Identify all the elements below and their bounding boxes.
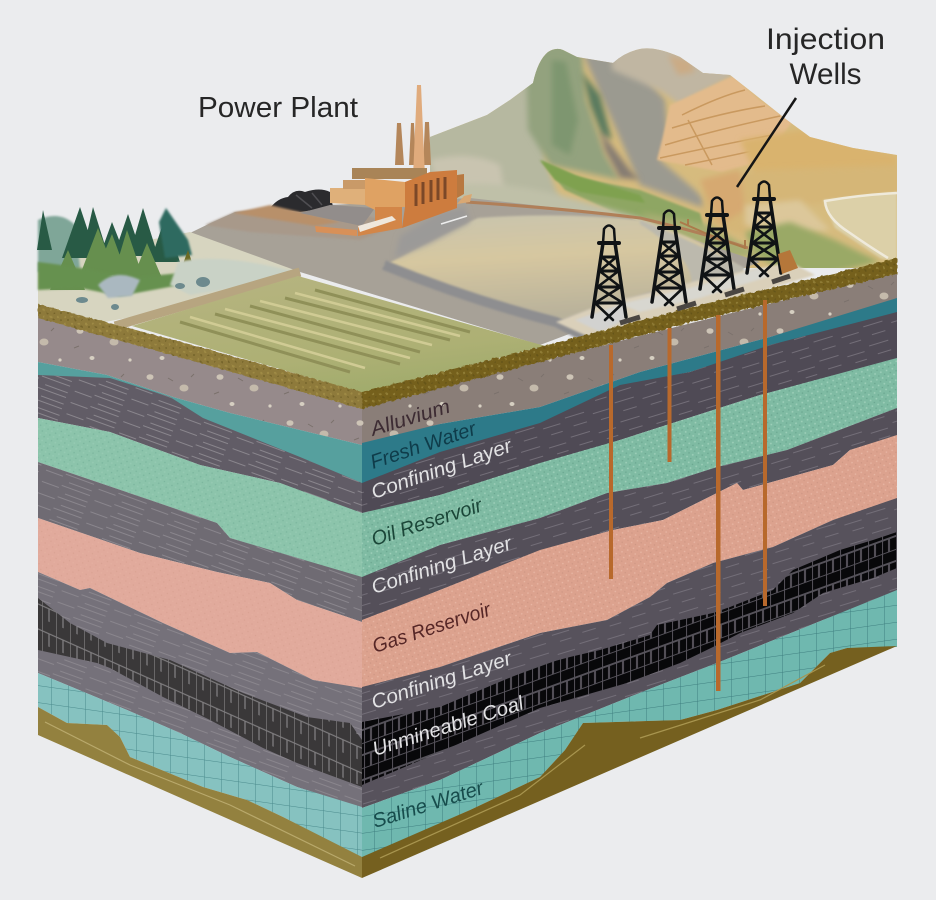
right: fresh water [362,298,897,485]
injection well pipes [609,300,767,691]
right: confining layer 1 [362,312,897,514]
label: Power Plant: Power Plant [198,92,358,124]
right: alluvium [362,272,897,445]
left: confining layer 1 [38,375,362,514]
label: Injection Wells: Wells [790,58,862,91]
right face of block [362,272,897,878]
left: unmineable coal [38,598,362,787]
back ground plain [130,198,760,345]
right: saline water [362,590,897,858]
terraced slope [657,76,792,172]
layer labels: Saline Water [370,777,487,833]
layer labels: Confining Layer [368,435,516,504]
right: gas reservoir [362,435,897,689]
label: Injection Wells [766,23,885,91]
left: fresh water [38,362,362,485]
power plant [233,85,472,236]
well pad [556,262,815,342]
right: oil reservoir [362,358,897,578]
road [466,202,748,248]
label: Injection Wells: Injection [766,23,885,56]
layer labels: Gas Reservoir [370,598,495,658]
arrow: injection wells pointer [737,98,796,187]
mountains [430,48,897,268]
layer labels: Oil Reservoir [369,494,486,551]
layer labels: Confining Layer [369,647,516,714]
forest [37,207,300,322]
left: confining layer 3 [38,572,362,808]
surface landscape [37,30,905,393]
left face of block [38,315,362,878]
dirt track [115,272,300,326]
right: unmineable coal [362,532,897,785]
layer labels: Confining Layer [369,532,516,599]
layer labels: Alluvium [367,396,453,441]
left: oil reservoir [38,418,362,578]
left: alluvium [38,315,362,445]
fence [680,219,745,249]
derricks [592,182,798,323]
crop field [132,276,545,393]
central basin [384,215,745,320]
left: gas reservoir [38,518,362,690]
left: saline water [38,673,362,858]
coal piles [270,190,333,212]
right: bedrock [362,646,897,878]
layer labels [367,396,527,833]
right: confining layer 2 [362,408,897,622]
surface crust edge [38,258,897,409]
right: confining layers [362,498,897,808]
layer labels: Fresh Water [368,418,480,474]
left: confining layer 2 [38,462,362,622]
layer labels: Unmineable Coal [370,692,527,761]
left: bedrock [38,707,362,878]
